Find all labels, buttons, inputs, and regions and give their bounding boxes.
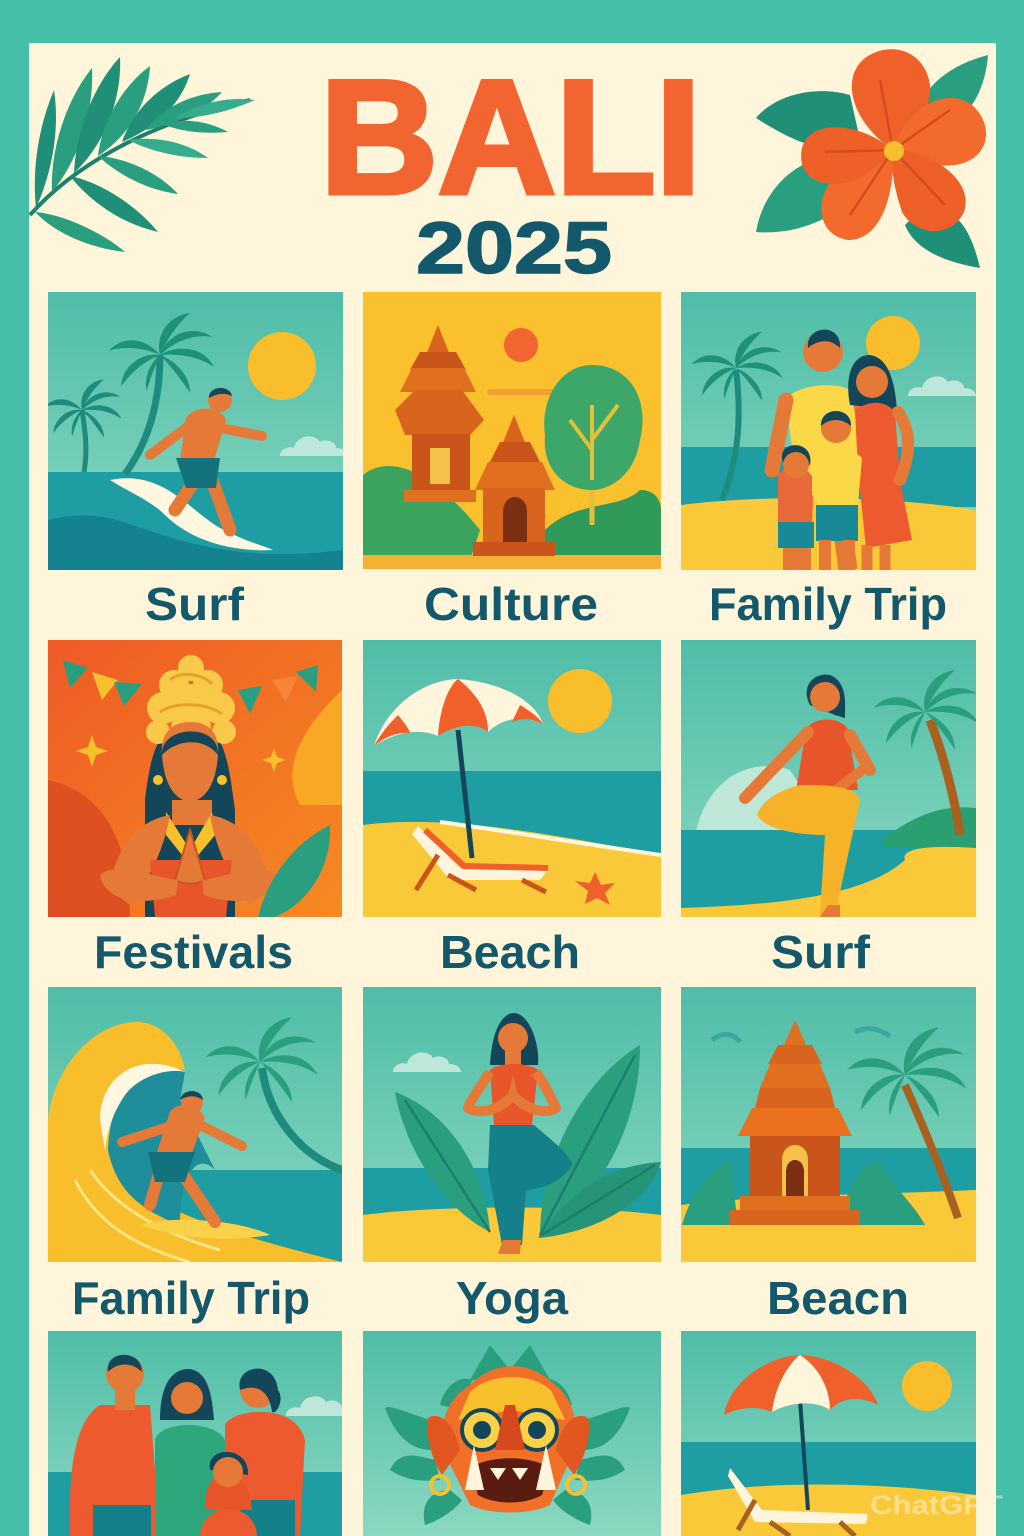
label: beach misspelled: Beacn <box>767 1272 909 1324</box>
panel: family <box>48 1331 354 1536</box>
title: BALI <box>320 47 701 228</box>
panel: beach <box>363 640 661 917</box>
panel: family trip <box>681 292 976 570</box>
panel: surf <box>45 292 348 570</box>
label: surf: Surf <box>145 578 245 630</box>
panel: culture <box>363 292 661 569</box>
panel: barong mask <box>363 1331 661 1536</box>
label: family trip: Family Trip <box>72 1272 310 1324</box>
panel: festivals <box>48 640 342 917</box>
panel: yoga <box>363 987 661 1262</box>
watermark: ChatGPT <box>870 1490 1004 1520</box>
icon: hibiscus flower <box>756 49 988 268</box>
label: family trip: Family Trip <box>709 578 947 630</box>
label: surf: Surf <box>771 926 871 978</box>
subtitle year: 2025 <box>416 208 612 289</box>
label: beach: Beach <box>440 926 580 978</box>
panel: surfer wave <box>48 987 342 1262</box>
panel: yoga labelled surf <box>681 640 979 917</box>
label: festivals: Festivals <box>94 926 293 978</box>
label: culture: Culture <box>424 578 598 630</box>
label: yoga: Yoga <box>456 1272 568 1324</box>
icon: palm leaf <box>30 57 255 252</box>
panel: beach umbrella <box>681 1331 976 1536</box>
panel: temple beach <box>681 987 976 1262</box>
